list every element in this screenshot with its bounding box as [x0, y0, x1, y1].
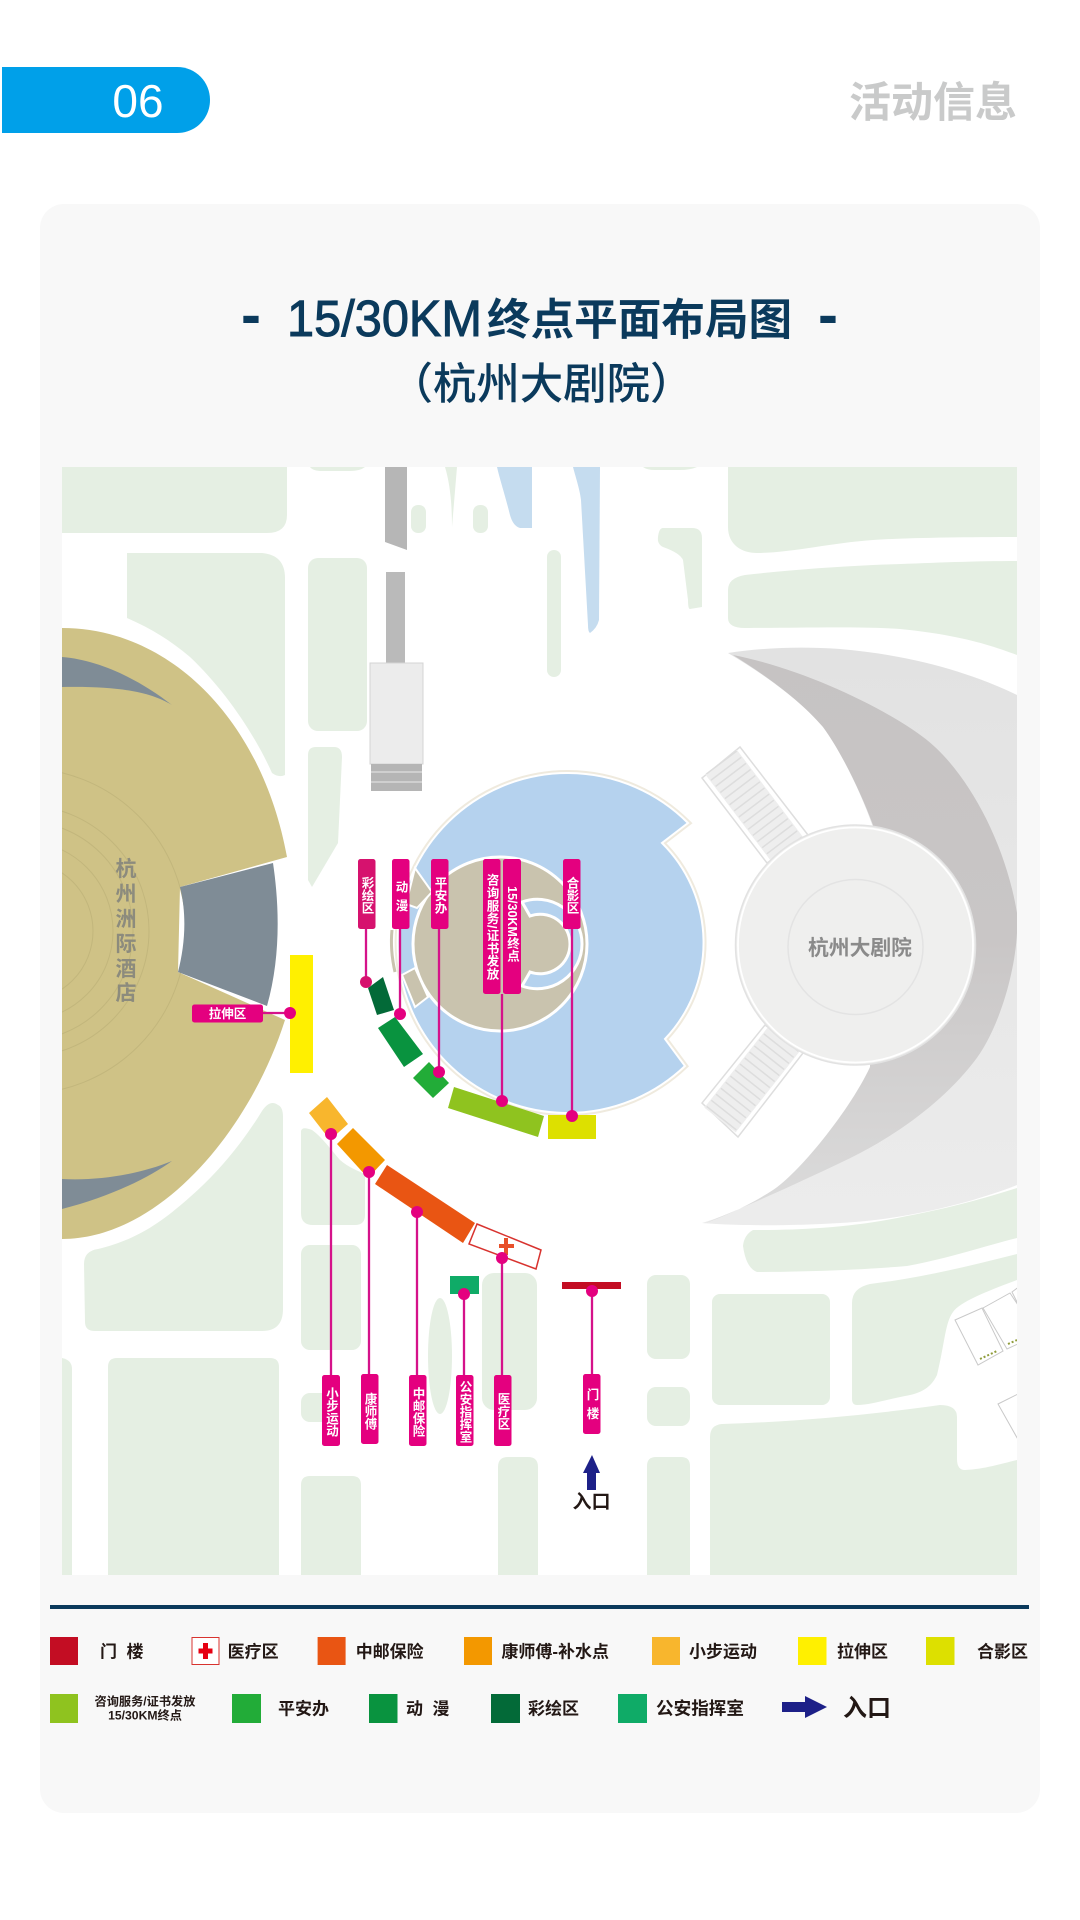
legend: 门楼: [50, 1637, 143, 1665]
hotel label: 际: [116, 933, 136, 956]
pin: 动漫: [392, 859, 410, 1020]
entrance label: 入口: [572, 1491, 611, 1513]
zone: 小步运动: [309, 1097, 348, 1140]
header number tab: 06: [112, 75, 164, 127]
opera house rotunda: 杭州大剧院: [808, 936, 912, 960]
hotel label: 州: [116, 883, 136, 906]
zone: 康师傅: [337, 1128, 385, 1178]
zone: 平安办: [413, 1062, 449, 1098]
legend: 咨询服务: [50, 1694, 195, 1723]
pin: 合影区: 合影区: [564, 875, 579, 914]
pin: 医疗区: 医疗区: [496, 1392, 510, 1430]
hotel label: 洲: [116, 908, 136, 931]
legend: 合影区: [926, 1637, 1028, 1665]
pin: 医疗区: [494, 1252, 512, 1446]
legend: 公安指挥室: 公安指挥室: [656, 1698, 744, 1718]
pin: 康师傅: [361, 1166, 378, 1444]
legend: 拉伸区: 拉伸区: [837, 1642, 888, 1662]
legend: 拉伸区: [798, 1637, 888, 1665]
pin: 小步运动: 小步运动: [324, 1387, 338, 1438]
legend: [50, 1637, 1028, 1723]
legend: 动漫: 动 漫: [406, 1700, 449, 1718]
legend: 公安指挥室: [618, 1694, 744, 1723]
small white buildings: [955, 1286, 1020, 1443]
hotel building: [62, 628, 287, 1239]
legend: 彩绘区: [491, 1694, 579, 1723]
zone: 公安指挥室: [450, 1276, 479, 1294]
pin: 公安指挥室: 公安指挥室: [458, 1380, 472, 1443]
title: 终点平面布局图: [487, 297, 792, 345]
zone: 咨询服务: [448, 1087, 544, 1137]
legend: 咨询服务: 咨询服务/证书发放: [95, 1694, 195, 1708]
legend: 中邮保险: [318, 1637, 424, 1665]
header section label: 活动信息: [849, 79, 1017, 126]
pin: 中邮保险: 中邮保险: [410, 1386, 425, 1437]
green spaces: [62, 467, 1017, 1578]
pin: 咨询服务与终点: 15/30KM终点: [505, 886, 519, 962]
opera house rotunda: [736, 825, 976, 1065]
opera house crescent: [702, 648, 1017, 1225]
legend: 小步运动: 小步运动: [689, 1642, 757, 1662]
pin: 中邮保险: [409, 1206, 426, 1446]
pin: 门楼: 门楼: [584, 1387, 599, 1426]
title: [241, 281, 838, 348]
zone: 医疗区: [469, 1224, 541, 1269]
pin: 平安办: 平安办: [432, 876, 447, 914]
header number tab: [2, 67, 210, 133]
panel: main card: [40, 204, 1040, 1813]
pin: 彩绘区: [358, 859, 376, 988]
legend: 入口: [782, 1695, 891, 1722]
pin: 合影区: [563, 859, 580, 1122]
hotel label: 酒: [116, 958, 136, 981]
legend divider: [50, 1605, 1029, 1609]
pin: 小步运动: [322, 1128, 340, 1446]
pin: 公安指挥室: [456, 1288, 474, 1446]
zone: 门楼: [562, 1282, 621, 1289]
hotel label: 店: [116, 982, 136, 1005]
pin: 动漫: 动漫: [394, 880, 408, 918]
legend: 医疗区: 医疗区: [228, 1642, 279, 1662]
pin: 彩绘区: 彩绘区: [360, 876, 374, 914]
legend: 平安办: [232, 1694, 329, 1723]
legend: 小步运动: [652, 1637, 757, 1665]
gray road and white block: [370, 467, 423, 791]
opera house stairs: [702, 747, 808, 1137]
legend: 动漫: [369, 1694, 449, 1723]
pin: 咨询服务与终点: 咨询服务/证书发放: [484, 872, 499, 981]
pin: 拉伸区: 拉伸区: [209, 1006, 246, 1021]
hotel label: 杭: [116, 857, 136, 881]
zone: 合影区: [548, 1115, 596, 1139]
legend: 康师傅: [464, 1637, 609, 1665]
site map: [0, 467, 1020, 1578]
title: -: [241, 281, 261, 348]
icon: entrance arrow: [583, 1455, 600, 1490]
pin: 康师傅: 康师傅: [362, 1391, 377, 1430]
hotel label: [116, 857, 136, 1005]
river water: [497, 467, 600, 633]
zone: 拉伸区: [290, 955, 313, 1073]
legend: 合影区: 合影区: [977, 1642, 1028, 1662]
zone: 中邮保险: [375, 1165, 475, 1243]
legend: 中邮保险: 中邮保险: [356, 1642, 424, 1662]
legend: 咨询服务: 15/30KM终点: [108, 1708, 182, 1722]
legend: 平安办: 平安办: [278, 1700, 329, 1718]
subtitle: （杭州大剧院）: [390, 361, 693, 409]
zone: 动漫: [378, 1017, 423, 1067]
pin: 拉伸区: [192, 1004, 296, 1022]
title: -: [818, 281, 838, 348]
legend: 康师傅: 康师傅-补水点: [501, 1642, 609, 1662]
title: 15/30KM: [287, 290, 482, 347]
pin: 门楼: [583, 1285, 600, 1434]
legend: 彩绘区: 彩绘区: [528, 1698, 579, 1718]
pin: 平安办: [431, 859, 448, 1078]
pin: 咨询服务与终点: [483, 859, 521, 1107]
plaza fountain: [391, 773, 704, 1113]
zone: 彩绘区: [368, 977, 394, 1015]
legend: 医疗区: [192, 1638, 279, 1664]
legend: 门楼: 门 楼: [100, 1642, 143, 1662]
legend: 入口: 入口: [843, 1695, 891, 1722]
